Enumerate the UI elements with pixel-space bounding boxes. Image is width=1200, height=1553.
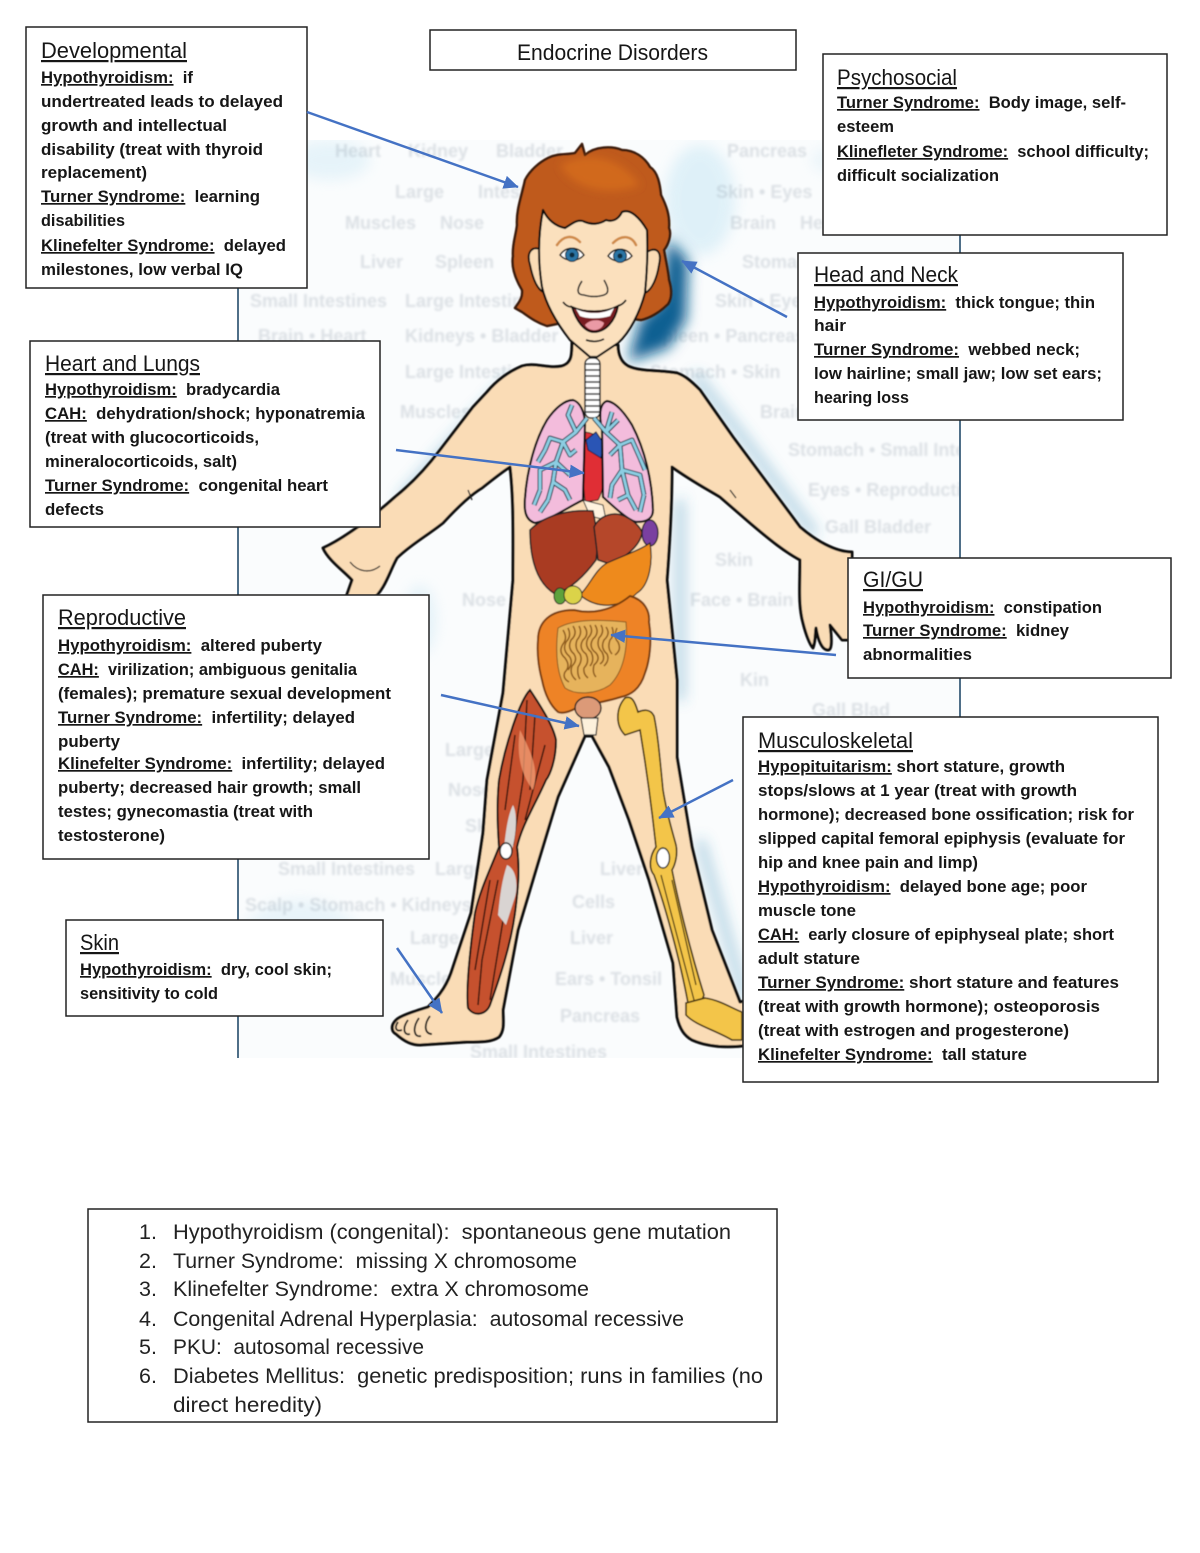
background: faded organ word panel: Bladder bbox=[496, 141, 563, 161]
text: head and neck effects: Turner Syndrome: webbed neck; bbox=[814, 340, 1080, 359]
text: musculoskeletal effects: Hypopituitarism: short stature, growth bbox=[758, 757, 1065, 776]
background: faded organ word panel: Large bbox=[395, 182, 444, 202]
text: GI/GU effects: abnormalities bbox=[863, 645, 972, 664]
text: heart and lungs effects: CAH: dehydration/shock; hyponatremia bbox=[45, 404, 366, 423]
background: faded organ word panel: Large bbox=[410, 928, 459, 948]
text: skin effects: sensitivity to cold bbox=[80, 984, 218, 1003]
item 6: Diabetes Mellitus: genetic predisposition; runs in families (no bbox=[173, 1364, 763, 1388]
background: faded organ word panel bbox=[238, 140, 1017, 1062]
background: faded organ word panel: Nose bbox=[448, 780, 492, 800]
panel: skin bbox=[66, 920, 383, 1016]
text: reproductive effects: CAH: virilization; ambiguous genitalia bbox=[58, 660, 358, 679]
text: reproductive effects: testes; gynecomastia (treat with bbox=[58, 802, 313, 821]
background: faded organ word panel: Large bbox=[435, 859, 484, 879]
text: musculoskeletal effects: Turner Syndrome: short stature and features bbox=[758, 973, 1119, 992]
item 6: 6. bbox=[139, 1364, 157, 1388]
arrow: developmental to head bbox=[307, 112, 518, 187]
text: musculoskeletal effects: CAH: early closure of epiphyseal plate; short bbox=[758, 925, 1114, 944]
panel: musculoskeletal bbox=[743, 717, 1158, 1082]
background: faded organ word panel: Small Intestines bbox=[470, 1042, 607, 1062]
background: faded organ word panel: Muscles bbox=[390, 969, 461, 989]
text: psychosocial effects: difficult socialization bbox=[837, 166, 999, 185]
text: skin effects bbox=[80, 960, 332, 1003]
item 5: PKU: autosomal recessive bbox=[173, 1335, 424, 1359]
heading: skin: Skin bbox=[80, 930, 119, 955]
item 6: direct heredity) bbox=[173, 1393, 322, 1417]
background: faded organ word panel: Brain bbox=[760, 402, 806, 422]
background: faded organ word panel: Face • Brain bbox=[690, 590, 793, 610]
text: heart and lungs effects bbox=[45, 380, 366, 519]
text: psychosocial effects: esteem bbox=[837, 117, 894, 136]
text: heart and lungs effects: Turner Syndrome: congenital heart bbox=[45, 476, 328, 495]
bladder bbox=[575, 697, 601, 719]
small intestine bbox=[557, 620, 627, 693]
item 1: 1. bbox=[139, 1220, 157, 1244]
arrow: head and neck to neck bbox=[682, 261, 787, 317]
text: developmental effects: Klinefelter Syndrome: delayed bbox=[41, 236, 286, 255]
background: faded organ word panel: Gall Blad bbox=[812, 700, 890, 720]
hair bbox=[513, 144, 671, 326]
blue cast shadow bbox=[400, 238, 815, 1000]
background: faded organ word panel: Intestines bbox=[478, 182, 562, 202]
leg bones bbox=[618, 697, 742, 1040]
item 5: 5. bbox=[139, 1335, 157, 1359]
leg muscles bbox=[467, 690, 556, 1014]
background: faded organ word panel: Gall Bladder bbox=[825, 517, 931, 537]
text: heart and lungs effects: mineralocorticoids, salt) bbox=[45, 452, 237, 471]
background: faded organ word panel: Muscles bbox=[300, 362, 371, 382]
panel: genetics list bbox=[88, 1209, 777, 1422]
heart bbox=[583, 432, 605, 502]
heading: developmental: Developmental bbox=[41, 38, 187, 63]
text: GI/GU effects bbox=[863, 598, 1102, 664]
background: faded organ word panel: Eyes • Reproductive bbox=[808, 480, 981, 500]
text: developmental effects: replacement) bbox=[41, 163, 147, 182]
arrow: heart and lungs to chest bbox=[396, 450, 584, 473]
heading: head and neck: Head and Neck bbox=[814, 262, 959, 287]
text: musculoskeletal effects: adult stature bbox=[758, 949, 860, 968]
text: reproductive effects: puberty; decreased hair growth; small bbox=[58, 778, 361, 797]
background: faded organ word panel: Small Intestines bbox=[250, 291, 387, 311]
item 1: Hypothyroidism (congenital): spontaneous gene mutation bbox=[173, 1220, 731, 1244]
text: musculoskeletal effects: slipped capital femoral epiphysis (evaluate for bbox=[758, 829, 1125, 848]
text: heart and lungs effects: Hypothyroidism: bradycardia bbox=[45, 380, 281, 399]
text: head and neck effects: Hypothyroidism: thick tongue; thin bbox=[814, 293, 1095, 312]
item 4: Congenital Adrenal Hyperplasia: autosomal recessive bbox=[173, 1307, 684, 1331]
arrow: skin to foot bbox=[397, 948, 442, 1013]
background: faded organ word panel: Pancreas bbox=[560, 1006, 640, 1026]
text: musculoskeletal effects: hip and knee pain and limp) bbox=[758, 853, 978, 872]
item 2: 2. bbox=[139, 1249, 157, 1273]
text: reproductive effects bbox=[58, 636, 391, 845]
item 4: 4. bbox=[139, 1307, 157, 1331]
nose bbox=[578, 280, 608, 296]
text: developmental effects: milestones, low verbal IQ bbox=[41, 260, 243, 279]
heading: heart and lungs: Heart and Lungs bbox=[45, 351, 200, 376]
text: developmental effects: growth and intellectual bbox=[41, 116, 227, 135]
text: reproductive effects: Klinefelter Syndrome: infertility; delayed bbox=[58, 754, 385, 773]
background: faded organ word panel: Large Intestines bbox=[405, 362, 543, 382]
background: faded organ word panel: Spleen • Pancreas bbox=[650, 326, 805, 346]
text: developmental effects bbox=[41, 68, 286, 279]
text: psychosocial effects: Klinefleter Syndrome: school difficulty; bbox=[837, 142, 1149, 161]
background: faded organ word panel: Nose bbox=[440, 213, 484, 233]
text: developmental effects: Turner Syndrome: learning bbox=[41, 187, 260, 206]
text: psychosocial effects: Turner Syndrome: Body image, self- bbox=[837, 93, 1126, 112]
background: faded organ word panel: Skin bbox=[465, 816, 503, 836]
body outline bbox=[323, 340, 852, 1047]
text: musculoskeletal effects: hormone); decreased bone ossification; risk for bbox=[758, 805, 1134, 824]
background: faded organ word panel: Stomach • Small Intestines bbox=[788, 440, 1017, 460]
background: faded organ word panel: Skin • Eyes bbox=[716, 182, 812, 202]
text: musculoskeletal effects: (treat with estrogen and progesterone) bbox=[758, 1021, 1069, 1040]
item 3: Klinefelter Syndrome: extra X chromosome bbox=[173, 1277, 589, 1301]
background: faded organ word panel: Stomach • Skin bbox=[650, 362, 780, 382]
text: musculoskeletal effects: Klinefelter Syndrome: tall stature bbox=[758, 1045, 1027, 1064]
background: faded organ word panel: Stomach bbox=[742, 252, 818, 272]
panel: GI/GU bbox=[848, 558, 1171, 678]
text: musculoskeletal effects: stops/slows at 1 year (treat with growth bbox=[758, 781, 1077, 800]
background: faded organ word panel: Spleen bbox=[435, 252, 494, 272]
background: faded organ word panel: Liver bbox=[600, 859, 643, 879]
heading: psychosocial: Psychosocial bbox=[837, 65, 957, 90]
text: reproductive effects: puberty bbox=[58, 732, 121, 751]
text: head and neck effects: low hairline; small jaw; low set ears; bbox=[814, 364, 1102, 383]
background: faded organ word panel: Kin bbox=[740, 670, 769, 690]
text: heart and lungs effects: defects bbox=[45, 500, 104, 519]
text: developmental effects: disabilities bbox=[41, 211, 125, 230]
text: psychosocial effects bbox=[837, 93, 1149, 185]
title bbox=[430, 30, 796, 70]
stomach bbox=[580, 543, 651, 605]
text: musculoskeletal effects: (treat with growth hormone); osteoporosis bbox=[758, 997, 1100, 1016]
background: faded organ word panel: Ears • Tonsil bbox=[555, 969, 662, 989]
text: musculoskeletal effects: muscle tone bbox=[758, 901, 856, 920]
background: faded organ word panel: Muscles bbox=[400, 402, 471, 422]
eyebrows bbox=[557, 237, 636, 245]
eyes bbox=[560, 248, 632, 262]
text: reproductive effects: Hypothyroidism: altered puberty bbox=[58, 636, 323, 655]
background: faded organ word panel: Small Intestines bbox=[278, 859, 415, 879]
arrow: GI/GU to intestine bbox=[611, 635, 836, 655]
item 6 bbox=[139, 1364, 763, 1417]
background: faded organ word panel: Scalp • Stomach • Kidneys bbox=[245, 895, 472, 915]
background: faded organ word panel: Brain bbox=[730, 213, 776, 233]
item 3: 3. bbox=[139, 1277, 157, 1301]
title: Endocrine Disorders bbox=[517, 40, 708, 65]
text: GI/GU effects: Turner Syndrome: kidney bbox=[863, 621, 1070, 640]
panel: heart and lungs bbox=[30, 341, 380, 527]
heading: GI/GU: GI/GU bbox=[863, 567, 923, 592]
mouth bbox=[572, 306, 618, 332]
child body illustration bbox=[323, 144, 852, 1047]
panel: reproductive bbox=[43, 595, 429, 859]
background: faded organ word panel: Heart bbox=[800, 213, 846, 233]
text: reproductive effects: testosterone) bbox=[58, 826, 165, 845]
text: developmental effects: disability (treat with thyroid bbox=[41, 140, 263, 159]
panel edge lines bbox=[238, 235, 960, 1058]
background: faded organ word panel: Liver bbox=[570, 928, 613, 948]
background: faded organ word panel: Brain • Heart bbox=[258, 326, 366, 346]
face bbox=[539, 210, 647, 357]
large intestine bbox=[538, 596, 650, 713]
text: developmental effects: undertreated leads to delayed bbox=[41, 92, 283, 111]
arrow: reproductive to pelvis bbox=[441, 695, 579, 726]
background: faded organ word panel: Large bbox=[445, 740, 494, 760]
text: musculoskeletal effects: Hypothyroidism: delayed bone age; poor bbox=[758, 877, 1087, 896]
text: head and neck effects: hair bbox=[814, 316, 846, 335]
background: faded organ word panel: Heart bbox=[335, 141, 381, 161]
heading: musculoskeletal: Musculoskeletal bbox=[758, 728, 913, 753]
gallbladder and pancreas bbox=[554, 588, 566, 604]
text: musculoskeletal effects bbox=[758, 757, 1134, 1064]
trachea bbox=[585, 358, 600, 418]
text: reproductive effects: Turner Syndrome: infertility; delayed bbox=[58, 708, 355, 727]
background: faded organ word panel: Liver bbox=[360, 252, 403, 272]
background: faded organ word panel: Skin • Eyes bbox=[715, 291, 811, 311]
panel: head and neck bbox=[798, 253, 1123, 420]
panel: psychosocial bbox=[823, 54, 1167, 235]
background: faded organ word panel: Large Intestines bbox=[405, 291, 543, 311]
arrow: musculoskeletal to bone bbox=[659, 780, 733, 818]
text: reproductive effects: (females); premature sexual development bbox=[58, 684, 391, 703]
item 2: Turner Syndrome: missing X chromosome bbox=[173, 1249, 577, 1273]
text: skin effects: Hypothyroidism: dry, cool skin; bbox=[80, 960, 332, 979]
text: head and neck effects bbox=[814, 293, 1102, 407]
background: faded organ word panel: Muscles bbox=[345, 213, 416, 233]
lungs bbox=[525, 400, 653, 523]
panel: developmental bbox=[26, 27, 307, 288]
spleen bbox=[642, 520, 658, 546]
background: faded organ word panel: Kidney bbox=[408, 141, 468, 161]
background: faded organ word panel: Kidneys • Bladder bbox=[405, 326, 558, 346]
text: GI/GU effects: Hypothyroidism: constipation bbox=[863, 598, 1102, 617]
liver bbox=[530, 511, 597, 594]
background: faded organ word panel: Pancreas bbox=[727, 141, 807, 161]
text: heart and lungs effects: (treat with glucocorticoids, bbox=[45, 428, 259, 447]
ears bbox=[529, 248, 543, 292]
background: faded organ word panel: Skin bbox=[715, 550, 753, 570]
toes bbox=[396, 1016, 432, 1036]
background: faded organ word panel: Nose bbox=[462, 590, 506, 610]
background: faded organ word panel: Cells bbox=[572, 892, 615, 912]
diaphragm bbox=[583, 500, 606, 520]
heading: reproductive: Reproductive bbox=[58, 605, 186, 630]
text: head and neck effects: hearing loss bbox=[814, 388, 909, 407]
text: developmental effects: Hypothyroidism: if bbox=[41, 68, 193, 87]
